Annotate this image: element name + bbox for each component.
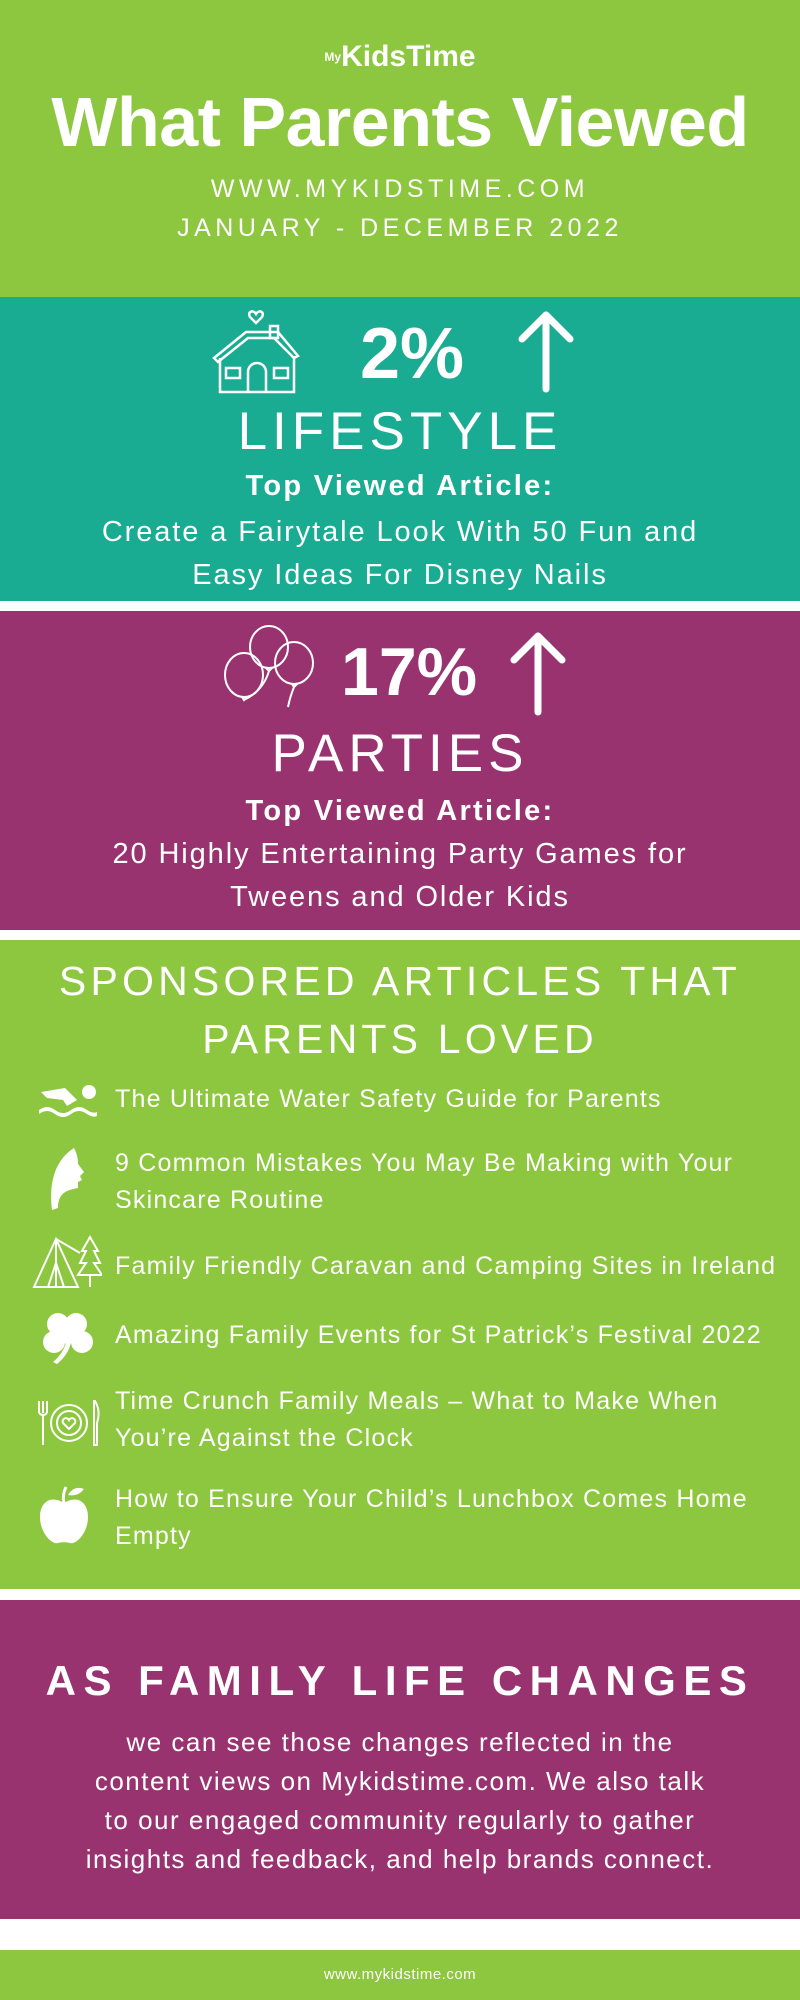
icon: plate bbox=[38, 1400, 100, 1446]
label: Top Viewed Article: bbox=[245, 470, 555, 502]
item 5 bbox=[115, 1387, 718, 1452]
item 3: Family Friendly Caravan and Camping Sites in Ireland bbox=[115, 1252, 776, 1280]
item 4: Amazing Family Events for St Patrick’s Festival 2022 bbox=[115, 1321, 762, 1349]
item 6 bbox=[115, 1485, 748, 1550]
body text: insights and feedback, and help brands connect. bbox=[86, 1844, 714, 1874]
body text: content views on Mykidstime.com. We also talk bbox=[95, 1766, 705, 1796]
title: What Parents Viewed bbox=[51, 83, 749, 161]
article text bbox=[112, 838, 688, 913]
date range: JANUARY - DECEMBER 2022 bbox=[177, 214, 623, 242]
panel: footer bbox=[0, 1950, 800, 2000]
icon: swimmer bbox=[39, 1085, 97, 1117]
icon: apple bbox=[40, 1486, 88, 1544]
item 2: Skincare Routine bbox=[115, 1186, 325, 1214]
heading: AS FAMILY LIFE CHANGES bbox=[46, 1657, 754, 1704]
icon: tent bbox=[32, 1235, 102, 1288]
heading: sponsored: PARENTS LOVED bbox=[202, 1016, 598, 1062]
body text: we can see those changes reflected in the bbox=[126, 1727, 674, 1757]
label: Top Viewed Article: bbox=[245, 795, 555, 827]
icon: shamrock bbox=[43, 1313, 93, 1364]
item 6: Empty bbox=[115, 1522, 192, 1550]
panel: family life changes bbox=[0, 1600, 800, 1919]
logo: MyKidsTime bbox=[324, 40, 476, 73]
item 2: 9 Common Mistakes You May Be Making with Your bbox=[115, 1149, 733, 1177]
heading: parties: PARTIES bbox=[272, 724, 528, 783]
panel: header bbox=[0, 0, 800, 297]
article text bbox=[102, 516, 698, 591]
body text: to our engaged community regularly to gather bbox=[105, 1805, 695, 1835]
heading: sponsored bbox=[59, 958, 741, 1062]
arrow up bbox=[518, 312, 574, 392]
panel: lifestyle bbox=[0, 297, 800, 601]
body text bbox=[86, 1727, 714, 1874]
item 1: The Ultimate Water Safety Guide for Parents bbox=[115, 1085, 662, 1113]
article text: Easy Ideas For Disney Nails bbox=[192, 559, 608, 591]
article text: 20 Highly Entertaining Party Games for bbox=[112, 838, 688, 870]
item 5: You’re Against the Clock bbox=[115, 1424, 414, 1452]
item 5: Time Crunch Family Meals – What to Make When bbox=[115, 1387, 718, 1415]
article text: Tweens and Older Kids bbox=[230, 881, 570, 913]
panel: parties bbox=[0, 611, 800, 930]
item 6: How to Ensure Your Child’s Lunchbox Comes Home bbox=[115, 1485, 748, 1513]
stat: 2%: 2% bbox=[360, 314, 464, 394]
icon: house bbox=[212, 310, 300, 394]
website: WWW.MYKIDSTIME.COM bbox=[211, 175, 589, 203]
icon: face bbox=[51, 1148, 84, 1210]
article text: Create a Fairytale Look With 50 Fun and bbox=[102, 516, 698, 548]
heading: lifestyle: LIFESTYLE bbox=[238, 402, 562, 461]
panel: sponsored bbox=[0, 940, 800, 1589]
footer url: www.mykidstime.com bbox=[324, 1966, 476, 1983]
item 2 bbox=[115, 1149, 733, 1214]
arrow up bbox=[510, 632, 566, 716]
icon: balloons bbox=[224, 625, 314, 708]
stat: 17%: 17% bbox=[341, 634, 477, 710]
heading: sponsored: SPONSORED ARTICLES THAT bbox=[59, 958, 741, 1004]
